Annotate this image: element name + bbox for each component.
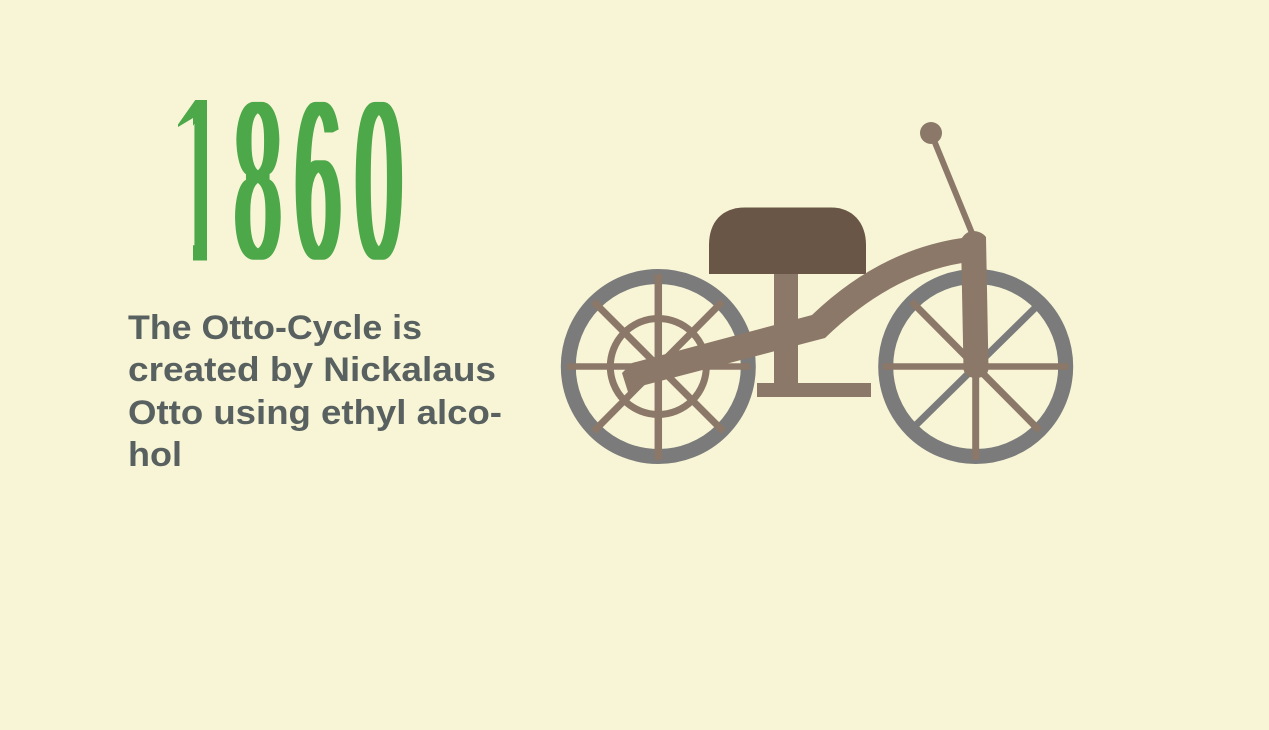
- text block: description: created by Nickalaus: [128, 351, 496, 389]
- icon: frame: [622, 238, 962, 392]
- heading: year 1860: 0: [356, 52, 401, 309]
- heading: year 1860: 1: [168, 48, 231, 313]
- text block: description: Otto using ethyl alco-: [128, 394, 502, 432]
- illustration: bicycle: [568, 122, 1066, 456]
- icon: front fork: [961, 231, 988, 378]
- text block: description: hol: [128, 436, 182, 474]
- icon: handlebar: [920, 122, 974, 238]
- heading: year 1860: [178, 100, 402, 260]
- text block: description: [128, 309, 502, 474]
- icon: front wheel: [886, 276, 1066, 456]
- text block: description: The Otto-Cycle is: [128, 309, 422, 347]
- icon: seat post and foot bar: [757, 270, 871, 397]
- heading: year 1860: 6: [296, 52, 340, 309]
- icon: rear wheel: [568, 276, 748, 456]
- heading: year 1860: 8: [236, 52, 280, 309]
- icon: seat: [709, 208, 866, 274]
